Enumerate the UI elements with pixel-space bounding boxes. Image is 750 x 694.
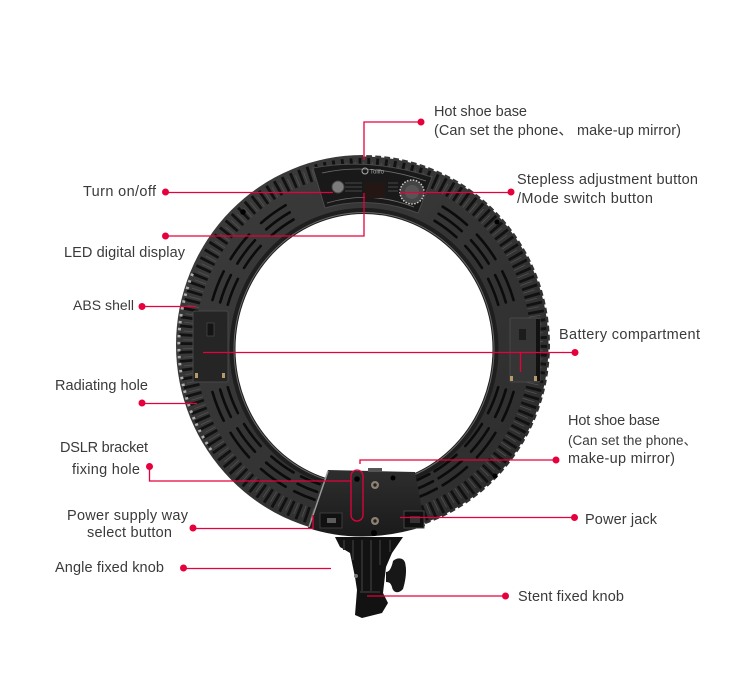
product: ring light bbox=[176, 155, 550, 618]
on/off button bbox=[332, 181, 344, 193]
callout: radiating hole: Radiating hole bbox=[55, 378, 148, 394]
callout: stent fixed knob: Stent fixed knob bbox=[518, 589, 624, 605]
callout: hot shoe base top: (Can set the phone、 make-up mirror) bbox=[434, 123, 681, 139]
callout: hot shoe base bottom bbox=[360, 413, 697, 467]
callout: hot shoe base top bbox=[364, 104, 681, 160]
stand bracket bbox=[335, 537, 403, 618]
callout: power jack bbox=[400, 512, 658, 528]
callout: power supply way select button: select button bbox=[87, 525, 172, 541]
callout: stepless adjustment button bbox=[400, 172, 698, 207]
callout: hot shoe base bottom: Hot shoe base bbox=[568, 413, 660, 429]
digital display bbox=[365, 183, 385, 198]
callout: hot shoe base top: Hot shoe base bbox=[434, 104, 527, 120]
callout: power supply way select button bbox=[67, 508, 313, 541]
callout: power jack: Power jack bbox=[585, 512, 658, 528]
callout: turn on/off bbox=[83, 184, 333, 200]
callout: stepless adjustment button: Stepless adjustment button bbox=[517, 172, 698, 188]
mode dial bbox=[400, 180, 424, 204]
callout: radiating hole bbox=[55, 378, 197, 406]
callout: LED digital display: LED digital display bbox=[64, 245, 186, 261]
ring body bbox=[176, 155, 550, 535]
callout: angle fixed knob bbox=[55, 560, 331, 576]
power jack socket bbox=[404, 511, 424, 528]
bottom control block bbox=[308, 468, 425, 537]
right battery compartment bbox=[510, 318, 540, 382]
left battery compartment bbox=[193, 311, 228, 382]
brand logo: Tolifo bbox=[370, 170, 385, 176]
radiating slots bbox=[212, 205, 514, 500]
callout: stepless adjustment button: /Mode switch button bbox=[517, 191, 653, 207]
callout: battery compartment: Battery compartment bbox=[559, 327, 700, 343]
callout: DSLR bracket fixing hole bbox=[60, 440, 363, 521]
power select switch bbox=[320, 513, 342, 528]
callout: DSLR bracket fixing hole: DSLR bracket bbox=[60, 440, 148, 456]
callout: hot shoe base bottom: make-up mirror) bbox=[568, 451, 675, 467]
callout: turn on/off: Turn on/off bbox=[83, 184, 157, 200]
callout: ABS shell: ABS shell bbox=[73, 297, 134, 313]
stent fixed knob part bbox=[386, 558, 406, 592]
top control panel bbox=[313, 164, 432, 213]
callout: angle fixed knob: Angle fixed knob bbox=[55, 560, 164, 576]
callout: LED digital display bbox=[64, 193, 364, 261]
callout: ABS shell bbox=[73, 297, 196, 313]
callout: DSLR bracket fixing hole: fixing hole bbox=[72, 462, 140, 478]
callout: power supply way select button: Power supply way bbox=[67, 508, 189, 524]
callout: hot shoe base bottom: (Can set the phone、 bbox=[568, 433, 697, 448]
callout: battery compartment bbox=[203, 327, 700, 372]
callout: stent fixed knob bbox=[367, 589, 624, 605]
